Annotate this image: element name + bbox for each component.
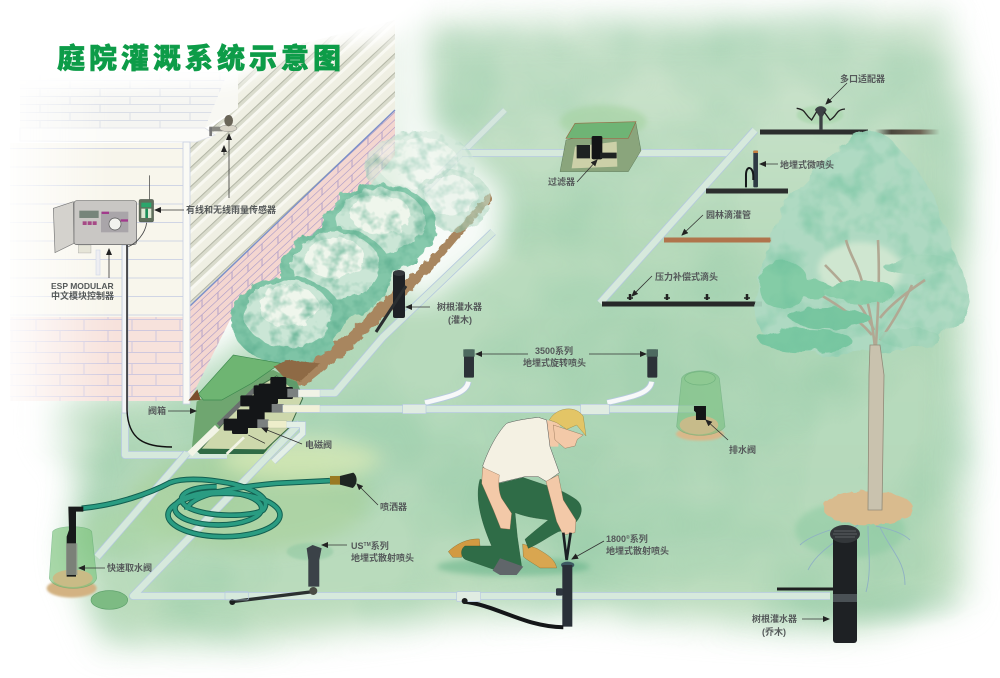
label: 3500 series: 地埋式旋转喷头 xyxy=(523,357,586,368)
back shrubs xyxy=(365,131,491,230)
pressure compensating emitter line xyxy=(602,302,762,306)
fade house into paper xyxy=(0,40,110,450)
tree root watering device xyxy=(777,525,860,643)
labels xyxy=(51,73,885,637)
white halo behind wall and shrubs xyxy=(395,0,505,300)
figure: kneeling man xyxy=(437,409,590,627)
label: emitter: 压力补偿式滴头 xyxy=(655,271,718,282)
drain valve xyxy=(676,371,725,441)
label: filter: 过滤器 xyxy=(548,176,575,187)
label: shrub bubbler: (灌木) xyxy=(448,314,472,325)
blond hair xyxy=(549,409,586,436)
canopy xyxy=(754,130,969,354)
1800 series spray head xyxy=(561,562,574,568)
screwdriver tool xyxy=(563,533,571,560)
icon: rain sensor xyxy=(209,115,237,136)
label: 1800 series xyxy=(606,533,669,556)
label: US series: 地埋式散射喷头 xyxy=(351,552,414,563)
icon: multi-outlet adapter xyxy=(797,106,845,130)
icon: ESP modular controller xyxy=(53,201,137,253)
label: dripline: 园林滴灌管 xyxy=(706,209,751,220)
micro spray line xyxy=(706,188,788,194)
roof shingles xyxy=(20,72,228,128)
head xyxy=(553,425,583,448)
control wire xyxy=(127,245,172,447)
pipes: main lateral lines xyxy=(97,110,830,596)
label: controller xyxy=(51,281,114,301)
annotation arrows xyxy=(79,83,847,619)
label: tree bubbler: 树根灌水器 xyxy=(752,613,797,624)
filter unit xyxy=(560,105,647,172)
trunk xyxy=(868,345,884,510)
label: controller: ESP MODULAR xyxy=(51,281,114,291)
landscape dripline xyxy=(664,238,772,242)
label: tree bubbler xyxy=(752,613,797,637)
label: 1800 series: 1800 xyxy=(606,534,626,544)
valve box lid xyxy=(198,355,281,400)
branches xyxy=(812,240,925,348)
label: controller: 中文模块控制器 xyxy=(51,290,114,301)
label: 1800 series: 地埋式散射喷头 xyxy=(606,545,669,556)
label: 1800 series: 系列 xyxy=(630,533,648,544)
label: drain valve: 排水阀 xyxy=(729,444,756,455)
label: valve box: 阀箱 xyxy=(148,405,166,416)
corner trim xyxy=(183,142,190,404)
gap showing lawn and branches xyxy=(818,242,902,298)
work boots xyxy=(448,539,480,557)
label: sprayer: 喷洒器 xyxy=(380,501,407,512)
white pipes inside box xyxy=(190,427,217,454)
label: 3500 series: 3500系列 xyxy=(535,345,573,356)
house xyxy=(0,0,440,450)
US series spray head xyxy=(225,543,333,605)
label: quick coupler: 快速取水阀 xyxy=(107,562,152,573)
label: US series: US xyxy=(351,541,364,551)
spray nozzle xyxy=(330,476,341,485)
label: US series xyxy=(351,540,414,563)
green trousers xyxy=(461,478,581,569)
valve box with electric valves xyxy=(188,355,320,462)
front wall brick xyxy=(10,317,190,401)
title: 庭院灌溉系统示意图 xyxy=(57,42,345,74)
valve box lid xyxy=(91,591,128,609)
3500 series rotor heads xyxy=(403,349,658,414)
quick coupling valve xyxy=(47,507,128,609)
grass around mulch xyxy=(795,502,905,558)
gutter xyxy=(20,128,215,142)
icon: micro spray head xyxy=(746,151,758,187)
label: tree bubbler: (乔木) xyxy=(762,626,786,637)
label: micro spray: 地埋式微喷头 xyxy=(780,159,834,170)
mulch ring xyxy=(823,491,913,525)
icon: wireless rain sensor receiver xyxy=(128,175,154,247)
drip zone lines xyxy=(602,130,940,306)
skin: neck xyxy=(547,420,560,447)
label: rain sensor: 有线和无线雨量传感器 xyxy=(186,204,276,215)
solenoid valves xyxy=(225,378,292,433)
label: US series: TM xyxy=(364,542,371,548)
front shrubs xyxy=(231,184,437,364)
label: solenoid: 电磁阀 xyxy=(305,439,332,450)
tree xyxy=(754,130,969,592)
icon: shrub bubbler xyxy=(376,270,406,332)
garden hose with spray nozzle xyxy=(82,473,357,537)
side wall siding xyxy=(190,20,395,306)
label: shrub bubbler: 树根灌水器 xyxy=(437,301,482,312)
label: 1800 series: ® xyxy=(626,534,630,541)
polo shirt xyxy=(483,417,559,483)
label: US series: 系列 xyxy=(371,540,389,551)
front wall siding xyxy=(10,143,185,317)
label: 3500 series xyxy=(523,345,586,368)
side wall brick xyxy=(190,110,395,400)
lower foliage clusters xyxy=(757,256,958,352)
mulch bed xyxy=(285,193,492,385)
multi-outlet line xyxy=(760,130,868,134)
conduit xyxy=(122,245,128,413)
tree roots xyxy=(800,525,910,592)
label: shrub bubbler xyxy=(437,301,482,325)
label: multi-outlet adapter: 多口适配器 xyxy=(840,73,885,84)
arms xyxy=(482,467,512,529)
